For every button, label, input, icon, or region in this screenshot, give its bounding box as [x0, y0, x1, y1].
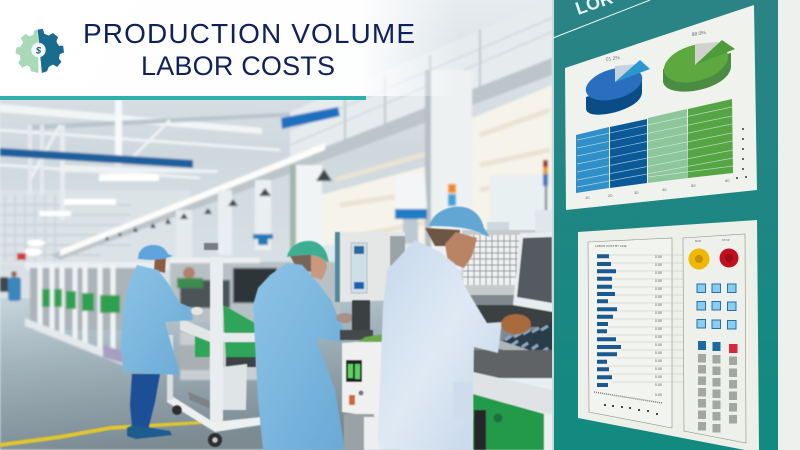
- lower card: bars and control buttons: [578, 220, 759, 450]
- icon: gear with dollar sign: [16, 29, 64, 73]
- teal rule: [0, 96, 366, 100]
- horizontal bar list: 0.00: [655, 383, 662, 387]
- horizontal bar list: 0.00: [655, 263, 662, 267]
- legs and shoes: [130, 374, 160, 430]
- hand: [501, 314, 531, 334]
- pie chart: green: 88.0%: [691, 30, 707, 38]
- horizontal bar list: 0.00: [655, 271, 662, 275]
- shelves: [180, 318, 210, 342]
- right white wall: [777, 0, 800, 450]
- bar table chart: 10: [585, 195, 590, 200]
- windows right: [320, 160, 450, 300]
- distant machine row: [25, 262, 175, 270]
- bar table chart: [576, 99, 747, 200]
- horizontal bar list: LABOR COST BY LINE: [595, 244, 627, 248]
- horizontal bar list: 0.00: [655, 393, 662, 397]
- horizontal bar list: 0.00: [655, 351, 662, 355]
- worker 2: blue coat and green hard hat: [253, 241, 354, 450]
- control button panel: [683, 234, 746, 443]
- horizontal bar list: 0.00: [655, 367, 662, 371]
- neck and face: [154, 255, 166, 273]
- horizontal bar list: 0.00: [655, 255, 662, 259]
- horizontal bar list: 0.00: [655, 287, 662, 291]
- coat body: [121, 265, 193, 375]
- horizontal bar list: 0.00: [655, 295, 662, 299]
- main machine with grid, screen and keypad: [462, 210, 553, 450]
- pocket: [453, 382, 473, 419]
- control box with label plate: [335, 232, 405, 340]
- hair: [290, 254, 314, 272]
- hard hat: [287, 241, 329, 263]
- dark status buttons: [698, 341, 706, 350]
- horizontal bar list: 0.00: [655, 359, 662, 363]
- grey key grid: [698, 354, 737, 432]
- horizontal bar list: 0.00: [655, 335, 662, 339]
- red button: [720, 248, 738, 268]
- bar table chart: 30: [634, 190, 639, 195]
- pie chart: blue: [582, 55, 650, 115]
- white sensor box: [395, 173, 427, 210]
- control button panel: STOP: [722, 238, 730, 242]
- wheels: [208, 433, 222, 447]
- icon: gear with dollar sign: $: [35, 45, 42, 55]
- hand: [191, 307, 203, 315]
- columns: [425, 70, 472, 270]
- blue beam: [281, 107, 340, 129]
- horizontal bar list: 0.00: [655, 319, 662, 323]
- floor yellow line: [0, 421, 202, 447]
- blue sign: [253, 234, 273, 239]
- cap: [429, 207, 490, 237]
- floor: [0, 298, 400, 450]
- storage box: [223, 364, 247, 410]
- title: LABOR COSTS: [141, 51, 335, 81]
- factory background: [0, 0, 560, 450]
- face: [311, 255, 327, 280]
- uprights: [210, 257, 223, 422]
- title: PRODUCTION VOLUME: [83, 18, 415, 49]
- cap: [138, 245, 173, 260]
- bottom tray: [167, 393, 261, 432]
- teal panel: [552, 0, 778, 450]
- horizontal bar list: [588, 238, 703, 428]
- title: [83, 18, 415, 81]
- light blue buttons: [697, 284, 736, 329]
- green-switch cabinet: [342, 334, 384, 450]
- hand: [336, 313, 354, 323]
- pie chart: green: [659, 30, 735, 92]
- hanging lamps: [105, 169, 332, 240]
- cart: [167, 243, 261, 447]
- bar table chart: 50: [691, 183, 696, 188]
- horizontal bar list: 0.00: [655, 279, 662, 283]
- horizontal bar list: 0.00: [655, 327, 662, 331]
- coat body: [378, 240, 502, 450]
- horizontal bar list: 0.00: [655, 303, 662, 307]
- bar table chart: 60: [725, 178, 730, 183]
- title band: [0, 0, 460, 100]
- bar table chart: 20: [608, 193, 613, 198]
- long diagonal beam: [50, 58, 552, 260]
- back machinery behind workers: [170, 262, 340, 322]
- yellow button: [688, 248, 710, 270]
- horizontal bar list: 0.00: [655, 343, 662, 347]
- distant worker: [8, 277, 21, 301]
- horizontal bar list: 0.00: [655, 311, 662, 315]
- face: [445, 232, 477, 268]
- worker 1: blue coat and cap: [121, 245, 203, 439]
- upper wall panels: [290, 0, 552, 165]
- worker 3: pale shirt and blue cap: [378, 207, 531, 450]
- horizontal bar list: 0.00: [655, 375, 662, 379]
- diagonal rule: [553, 0, 650, 38]
- signal lights: [448, 184, 456, 193]
- green bins: [223, 305, 257, 357]
- coat body: [253, 263, 345, 450]
- pie chart: blue: 01.2%: [605, 55, 621, 63]
- upper card: charts: [565, 5, 757, 210]
- bar table chart: 40: [662, 187, 667, 192]
- hair: [425, 228, 460, 246]
- control button panel: RUN: [695, 239, 701, 243]
- monitor: [513, 232, 553, 312]
